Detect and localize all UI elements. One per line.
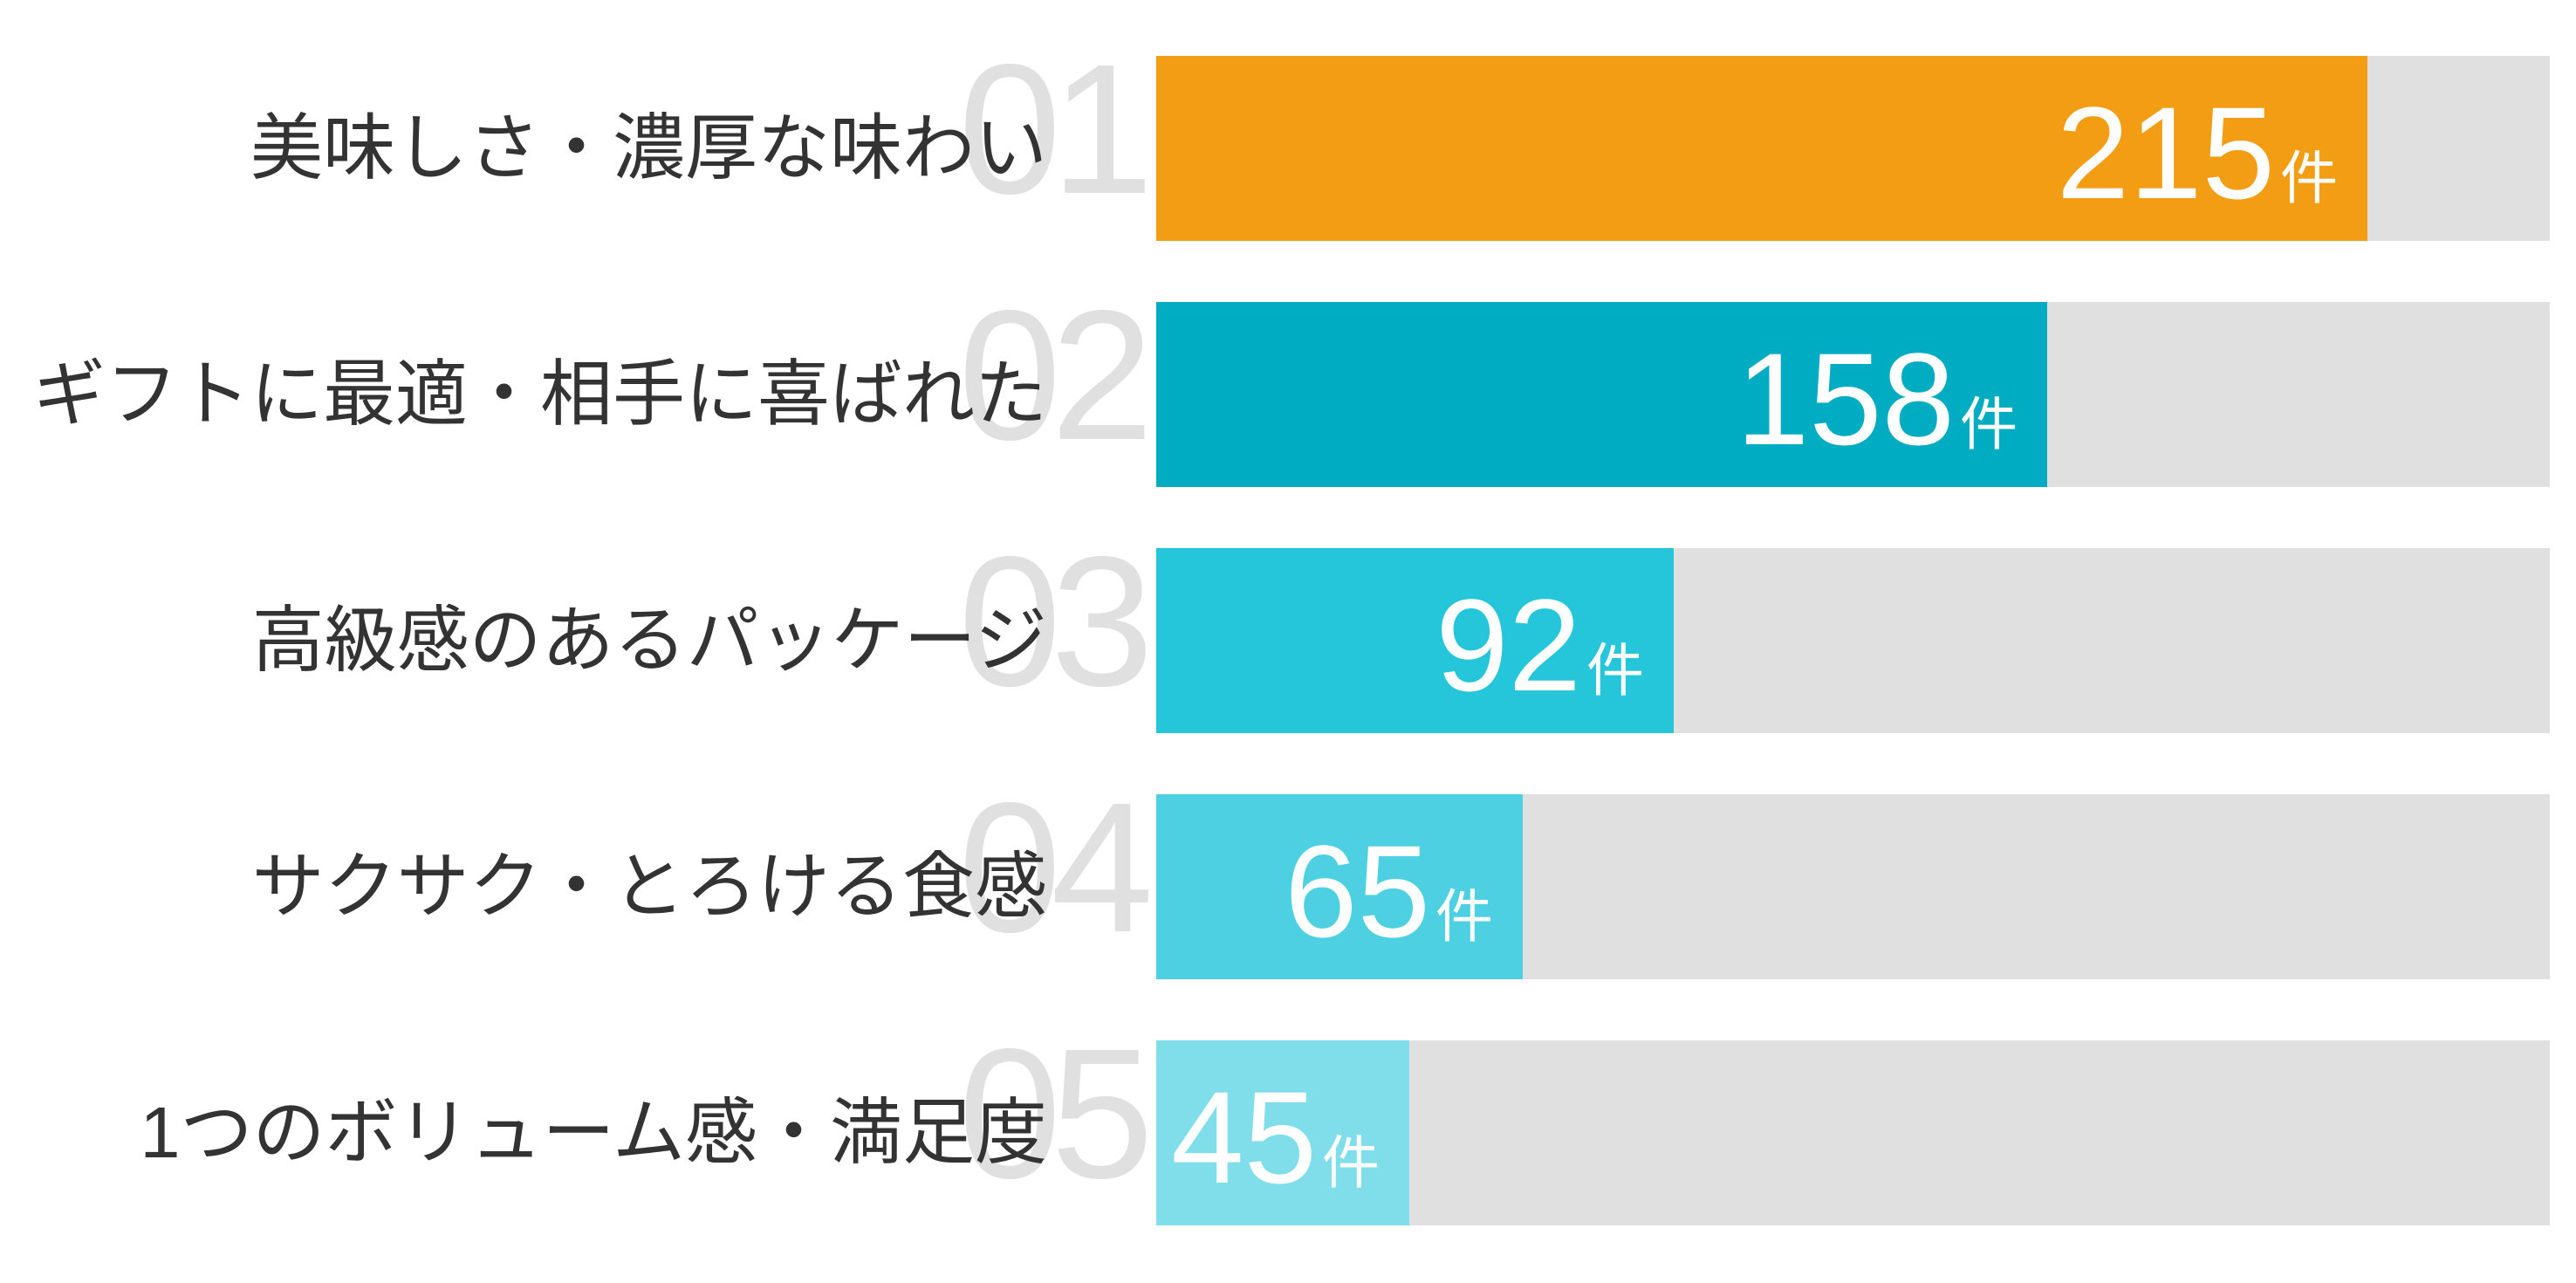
row 5 (140, 1010, 2550, 1225)
label 2: ギフトに最適・相手に喜ばれた (33, 353, 1047, 435)
track 1 (1156, 56, 2550, 241)
bar 5 (1156, 1040, 1409, 1225)
label 1: 美味しさ・濃厚な味わい (250, 107, 1047, 189)
label 5: 1つのボリューム感・満足度 (140, 1092, 1047, 1173)
rank number 05: 05 (958, 1010, 1143, 1217)
value 5: 45件 (1171, 1064, 1380, 1211)
value 3: 92件 (1435, 572, 1644, 718)
value 4: 65件 (1285, 818, 1493, 964)
rank number 01: 01 (958, 25, 1143, 232)
bar 4 (1156, 794, 1523, 979)
rank number 02: 02 (958, 271, 1143, 478)
bar 1 (1156, 56, 2367, 241)
track 2 (1156, 302, 2550, 487)
rank number 04: 04 (958, 764, 1143, 971)
rank number 03: 03 (958, 518, 1143, 724)
label 4: サクサク・とろける食感 (252, 846, 1047, 927)
track 5 (1156, 1040, 2550, 1225)
value 2: 158件 (1737, 326, 2018, 472)
row 3 (252, 518, 2550, 733)
bar 2 (1156, 302, 2047, 487)
track 4 (1156, 794, 2550, 979)
row 2 (33, 271, 2550, 487)
label 3: 高級感のあるパッケージ (252, 600, 1047, 681)
row 1 (250, 25, 2550, 241)
row 4 (252, 764, 2550, 979)
track 3 (1156, 548, 2550, 733)
value 1: 215件 (2057, 79, 2338, 226)
bar 3 (1156, 548, 1674, 733)
